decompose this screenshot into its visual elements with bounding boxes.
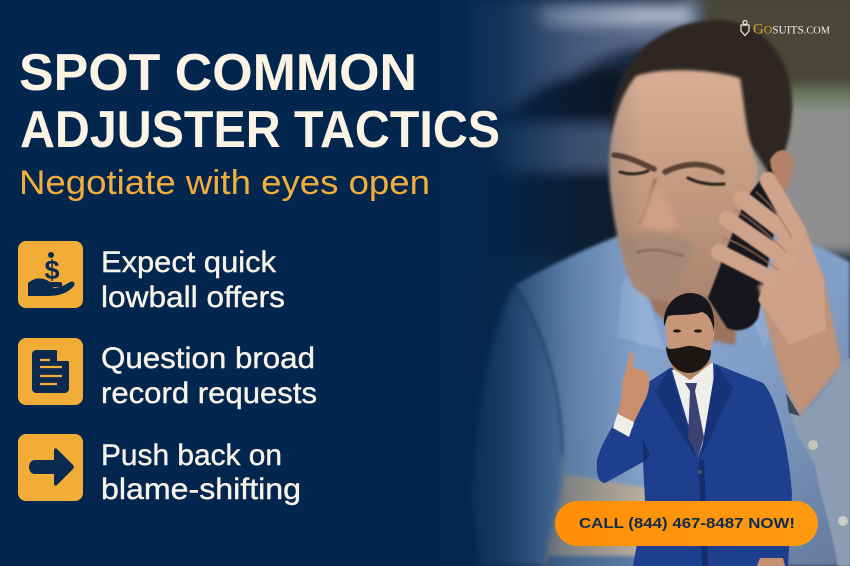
item: lowball offers: Expect quick [101, 246, 277, 279]
beard [666, 346, 711, 373]
jacket [597, 363, 792, 566]
logo: GOSUITS.COM [753, 22, 831, 38]
cta button: CALL (844) 467-8487 NOW! [579, 516, 795, 532]
hair [664, 293, 714, 332]
brows and eyes [614, 155, 724, 256]
icon: hand with dollar: $ [44, 255, 60, 285]
hand [719, 180, 826, 345]
item: record requests [18, 338, 317, 410]
photo: man in blue shirt [472, 20, 850, 566]
phone [708, 167, 782, 330]
icon: arrow [18, 434, 83, 501]
head [666, 300, 715, 373]
shirt cuff [786, 358, 850, 566]
item: lowball offers: lowball offers [101, 281, 285, 314]
stubble [622, 233, 695, 296]
item: record requests: Question broad [101, 342, 315, 375]
shirt bottom [548, 556, 660, 566]
face [609, 70, 758, 303]
left fade into navy [440, 0, 640, 566]
neck [640, 270, 740, 345]
raised hand [618, 352, 649, 422]
forearm [758, 270, 842, 416]
item: blame-shifting: blame-shifting [101, 473, 301, 506]
title: SPOT COMMON [19, 43, 417, 101]
necktie [685, 383, 704, 457]
photo: blurred accident scene [440, 0, 850, 566]
white cuff [613, 412, 634, 437]
icon: hand with dollar [18, 241, 83, 308]
ground behind arm [540, 455, 670, 566]
ear [770, 150, 793, 194]
shirt front [672, 363, 714, 457]
item: blame-shifting [18, 434, 301, 506]
title: ADJUSTER TACTICS [20, 100, 500, 158]
upper arm [472, 285, 563, 566]
lower hand and watch [757, 558, 785, 566]
lapels [655, 364, 733, 460]
item: blame-shifting: Push back on [101, 439, 282, 472]
jacket button [698, 470, 702, 474]
collar [617, 262, 665, 350]
nose [640, 185, 678, 231]
item: record requests: record requests [101, 377, 317, 410]
title [19, 43, 500, 158]
cta button [555, 501, 818, 546]
eyes [673, 329, 702, 333]
icon: shield [741, 20, 749, 36]
neck [672, 352, 710, 380]
hair [610, 20, 792, 172]
attorney figure [597, 293, 792, 566]
item: lowball offers [18, 241, 285, 314]
shirt torso [515, 232, 850, 566]
subtitle: Negotiate with eyes open [19, 164, 430, 202]
icon: document [18, 338, 83, 405]
jacket shading [643, 440, 708, 566]
